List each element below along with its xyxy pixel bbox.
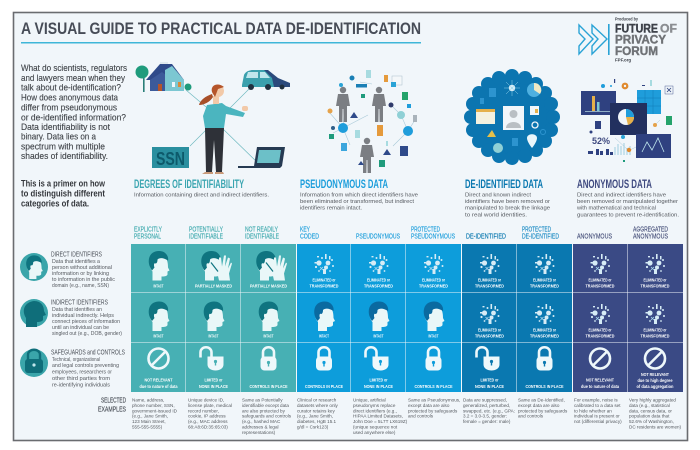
cell: key coded direct: ELIMINATED or [312,278,336,282]
example: aggregated anonymous: 52.6% of Washington, [629,419,674,424]
example: key coded: g/dl = Csrk123) [297,424,329,430]
column headers: PROTECTED [522,224,551,234]
section: de-identified data: Direct and known indirect [465,192,532,198]
cell: protected de-identified safeguards [517,343,572,392]
cell: potentially identifiable direct [186,244,240,292]
intro text: What do scientists, regulators [21,63,127,73]
primer text: This is a primer on how [21,178,106,188]
row label: direct identifiers: domain (e.g., name, SSN) [52,283,109,289]
cell: pseudonymous safeguards: NONE IN PLACE [364,384,393,389]
column headers: POTENTIALLY [189,224,223,234]
cell: protected pseudonymous direct [406,244,461,292]
illustration: anonymous dashboards [581,79,673,162]
column headers: EXPLICITLY [134,224,162,234]
section: anonymous data [576,177,679,218]
cell: pseudonymous safeguards: LIMITED or [370,378,388,382]
selected examples label [98,396,126,414]
example: key coded: diabetes, HgB 15.1 [297,419,337,424]
column headers: PSEUDONYMOUS [356,232,400,240]
intro text: and lawyers mean when they [21,73,125,83]
row label: safeguards and controls [20,348,125,388]
section: degrees of identifiability: DEGREES OF IDENTIFIABILITY [134,177,244,191]
cell: aggregated anonymous indirect: TRANSFORMED [640,334,670,338]
cell: explicitly personal safeguards: due to nature of data [140,384,178,389]
cell: pseudonymous indirect [351,293,406,342]
cell: pseudonymous direct: TRANSFORMED [364,284,393,288]
cell: protected de-identified direct [517,244,572,292]
selected examples label: EXAMPLES [98,404,126,414]
example: explicitly personal: (e.g., Jane Smith, [132,414,168,419]
column headers: DE-IDENTIFIED [522,232,559,240]
column headers: CODED [300,232,319,240]
cell: potentially identifiable safeguards [186,343,240,392]
cell: aggregated anonymous indirect: ELIMINATED or [644,328,667,332]
cell: anonymous indirect [573,293,628,342]
selected examples label: SELECTED [101,396,126,404]
illustration: de-identified scalloped circle [464,69,560,165]
cell: key coded indirect [297,293,350,342]
cell: de-identified indirect: TRANSFORMED [475,334,504,338]
column headers: PERSONAL [134,232,161,240]
cell: potentially identifiable indirect: INTACT [208,334,219,338]
cell: de-identified safeguards: LIMITED or [480,378,499,382]
section: pseudonymous data: PSEUDONYMOUS DATA [300,177,388,191]
primer text: to distinguish different [21,188,105,198]
example: pseudonymous: (unique sequence not [353,424,398,430]
section: anonymous data: guarantees to prevent re-identification. [577,212,679,218]
cell: de-identified direct: ELIMINATED or [478,278,501,282]
section: degrees of identifiability [134,177,269,198]
cell: de-identified indirect [462,293,516,342]
cell: de-identified indirect: ELIMINATED or [478,328,501,332]
column headers [134,224,668,240]
example: potentially identifiable: record number, [188,408,219,413]
example: key coded: datasets where only [297,403,339,408]
cell: anonymous direct: ELIMINATED or [588,278,612,282]
column headers: KEY [300,224,310,234]
cell: not readily identifiable indirect: INTACT [264,334,274,338]
example: de-identified: generalized, perturbed, [463,403,510,408]
example: protected de-identified: and controls [518,414,544,419]
example: pseudonymous: HIPAA Limited Datasets, [353,414,403,419]
cell: anonymous indirect: ELIMINATED or [588,328,612,332]
row label: direct identifiers: Data that identifies a [52,259,100,265]
example: not readily identifiable: identifiable except data [242,403,289,408]
illustration: woman with identifiers [136,62,290,174]
cell: potentially identifiable direct: PARTIALLY MASKED [195,284,232,288]
example: potentially identifiable: Unique device ID, [188,398,224,402]
example: pseudonymous: Unique, artificial [353,398,386,402]
example: explicitly personal: government-issued ID [132,408,178,413]
cell: key coded safeguards: CONTROLS IN PLACE [305,384,343,389]
section: pseudonymous data: been eliminated or transformed, but indirect [300,199,415,205]
cell: protected pseudonymous safeguards: CONTROLS IN PLACE [414,384,452,389]
example: pseudonymous: used anywhere else) [353,430,396,435]
section: anonymous data: with mathematical and technical [576,206,656,212]
cell: protected de-identified direct: ELIMINATED or [533,278,556,282]
row label: safeguards and controls: other third parties from [52,376,111,382]
section: pseudonymous data: identifiers remain intact. [300,206,362,212]
logo: Future of Privacy Forum: FPF.org [615,58,631,62]
row label: indirect identifiers: connect pieces of information [52,319,120,325]
cell: pseudonymous direct [351,244,406,292]
cell: potentially identifiable indirect [186,293,240,342]
row label: direct identifiers: DIRECT IDENTIFIERS [51,250,102,258]
illustration: anonymous dashboards: 52% [592,136,610,146]
section: degrees of identifiability: Information containing direct and indirect identifiers. [134,192,269,198]
logo: Future of Privacy Forum: OF [660,22,677,36]
row label: safeguards and controls: and legal controls preventing [52,363,119,369]
intro text [21,63,127,161]
row label: direct identifiers: person without additional [52,265,112,271]
row label: direct identifiers: to information in the public [52,277,115,283]
column headers: PROTECTED [411,224,440,234]
cell: key coded indirect: INTACT [319,334,329,338]
example: not readily identifiable: safeguards and controls [242,414,292,419]
cell: de-identified direct: TRANSFORMED [475,284,504,288]
example: potentially identifiable: (e.g., MAC address [188,419,228,424]
column headers: PSEUDONYMOUS [411,232,455,240]
section: anonymous data: been removed or manipulated together [577,199,678,205]
row label: direct identifiers [20,250,115,289]
matrix table [131,244,683,392]
intro text: spectrum with multiple [21,142,105,152]
cell: explicitly personal indirect [131,293,186,342]
example: not readily identifiable: addresses & legal [242,424,279,430]
cell: not readily identifiable indirect [241,293,296,342]
primer text [21,178,106,208]
example: not readily identifiable: (e.g., hashed MAC [242,419,281,424]
section: de-identified data: DE-IDENTIFIED DATA [465,177,543,191]
example: de-identified: female = gender: male) [463,419,511,424]
cell: explicitly personal safeguards [131,343,186,392]
intro text: binary. Data lies on a [21,132,96,142]
example: pseudonymous: direct identifiers (e.g., [353,408,397,413]
example: protected pseudonymous: except data are also [408,403,450,408]
cell: protected pseudonymous indirect: INTACT [428,334,439,338]
intro text: Data identifiability is not [21,122,110,132]
example: potentially identifiable: cookie, IP address [188,414,226,419]
example: aggregated anonymous: population data that [629,414,670,419]
example: potentially identifiable: license plate, medical [188,403,232,408]
cell: aggregated anonymous direct: ELIMINATED or [644,278,667,282]
cell: de-identified direct [462,244,516,292]
example: explicitly personal: Name, address, [132,398,164,402]
cell: protected de-identified indirect: ELIMINATED or [533,328,556,332]
cell: de-identified safeguards: NONE IN PLACE [475,384,504,389]
row label: indirect identifiers: Data that identifies an [52,307,102,313]
section: anonymous data: ANONYMOUS DATA [577,177,652,191]
row label: indirect identifiers: until an individual can be [52,325,109,331]
logo: Future of Privacy Forum [579,16,677,62]
cell: protected de-identified indirect: TRANSFORMED [530,334,559,338]
cell: not readily identifiable safeguards [241,343,296,392]
column headers: IDENTIFIABLE [189,232,223,240]
section: de-identified data: manipulated to break the linkage [465,206,550,212]
example: de-identified: swapped, etc. (e.g., GPA: [463,408,515,413]
intro text: talk about de-identification? [21,82,121,92]
cell: explicitly personal indirect: INTACT [154,334,164,338]
cell: protected de-identified indirect [517,293,572,342]
cell: key coded direct: TRANSFORMED [310,284,339,288]
row label: safeguards and controls: re-identifying individuals [52,382,110,388]
cell: protected pseudonymous direct: ELIMINATED or [422,278,445,282]
illustration: woman with identifiers: SSN [156,149,185,169]
cell: key coded safeguards [297,343,350,392]
intro text: or de-identified information? [21,112,126,122]
title: A VISUAL GUIDE TO PRACTICAL DATA DE-IDENTIFICATION [21,19,421,38]
cell: aggregated anonymous indirect [628,293,683,342]
row label: indirect identifiers: singled out (e.g., DOB, gender) [52,331,122,337]
example: anonymous: For example, noise is [574,398,618,402]
column headers: ANONYMOUS [633,232,668,240]
section: de-identified data: identifiers have been removed or [465,199,550,205]
cell: not readily identifiable safeguards: CONTROLS IN PLACE [250,384,288,389]
example: aggregated anonymous: Very highly aggregated [629,398,676,402]
row label: indirect identifiers [20,298,122,337]
example: not readily identifiable: representations) [242,430,276,435]
example: explicitly personal: 123 Main Street, [132,419,166,424]
example: protected pseudonymous: protected by safeguards [408,408,458,413]
example: aggregated anonymous: data, census data, or [629,408,672,413]
example: pseudonymous: pseudonyms replace [353,403,396,408]
column headers: AGGREGATED [633,224,668,234]
row label: safeguards and controls: SAFEGUARDS and CONTROLS [51,348,125,356]
row label: safeguards and controls: Technical, organizational [52,357,100,363]
cell: aggregated anonymous direct [628,244,683,292]
cell: aggregated anonymous safeguards: of data aggregation [636,384,674,389]
section: pseudonymous data [300,177,418,212]
logo: Future of Privacy Forum: PRIVACY [615,32,666,46]
example: key coded: curator retains key [297,408,335,413]
primer text: categories of data. [21,198,89,208]
example: anonymous: not (differential privacy) [574,419,622,424]
section: de-identified data [465,177,550,218]
intro text: shades of identifiability. [21,151,108,161]
example: de-identified: 3.2 = 3.0-3.5, gender: [463,414,507,419]
example: not readily identifiable: are also protected by [242,408,286,413]
cell: explicitly personal direct: INTACT [154,284,164,288]
example: protected de-identified: except data are also [518,403,560,408]
example: key coded: Clinical or research [297,398,337,402]
example: potentially identifiable: 68:A8:6D:35:65:03) [188,424,228,430]
cell: aggregated anonymous safeguards: NOT RELEVANT [641,372,669,377]
example: not readily identifiable: Same as Potentially [242,398,283,402]
illustration: pseudonymous network [328,70,417,173]
logo: Future of Privacy Forum: FUTURE [615,22,658,36]
cell: anonymous safeguards: NOT RELEVANT [586,378,614,382]
cell: de-identified safeguards [462,343,516,392]
example: key coded: (e.g., Jane Smith, [297,414,333,419]
example: de-identified: Data are suppressed, [463,398,507,402]
cell: protected pseudonymous indirect [406,293,461,342]
example: protected de-identified: protected by safeguards [518,408,568,413]
example: explicitly personal: 555-555-5555) [132,424,163,430]
cell: protected de-identified safeguards: CONTROLS IN PLACE [526,384,564,389]
cell: anonymous indirect: TRANSFORMED [586,334,615,338]
cell: protected pseudonymous direct: TRANSFORMED [419,284,448,288]
cell: aggregated anonymous safeguards: due to high degree [638,378,673,383]
column headers: ANONYMOUS [577,232,612,240]
row label: indirect identifiers: INDIRECT IDENTIFIERS [51,298,108,306]
example: explicitly personal: phone number, SSN, [132,403,175,408]
cell: aggregated anonymous safeguards [628,343,683,392]
example: anonymous: to hide whether an [574,408,612,413]
example: protected pseudonymous: Same as Pseudonymous, [408,398,460,402]
example: anonymous: calibrated to a data set [574,403,621,408]
column headers: DE-IDENTIFIED [466,232,506,240]
cell: anonymous safeguards [573,343,628,392]
section: pseudonymous data: Information from which direct identifiers have [300,192,418,198]
example: aggregated anonymous: data (e.g., statistical [629,403,670,408]
cell: key coded direct [297,244,350,292]
column headers: NOT READILY [245,224,278,234]
cell: pseudonymous indirect: INTACT [374,334,384,338]
example: pseudonymous: John Doe = 5L7T LX619Z) [353,419,408,424]
row label: safeguards and controls: employees, researchers or [52,370,112,376]
example: protected de-identified: Same as De-Identified, [518,398,565,402]
intro text: differ from pseudonymous [21,102,117,112]
cell: protected de-identified direct: TRANSFORMED [530,284,559,288]
cell: aggregated anonymous direct: TRANSFORMED [640,284,670,288]
cell: anonymous direct [573,244,628,292]
logo: Future of Privacy Forum: FORUM [615,44,658,58]
logo: Future of Privacy Forum: Produced by [615,16,638,22]
cell: potentially identifiable safeguards: LIMITED or [204,378,223,382]
cell: explicitly personal safeguards: NOT RELEVANT [144,378,173,382]
intro text: How does anonymous data [21,92,118,102]
cell: potentially identifiable safeguards: NONE IN PLACE [199,384,228,389]
row label: indirect identifiers: individual indirectly. Helps [52,313,114,319]
cell: not readily identifiable direct: PARTIALLY MASKED [250,284,287,288]
row label: direct identifiers: information or by linking [52,271,109,277]
example: anonymous: individual is present or [574,414,620,419]
example: protected pseudonymous: and controls [408,414,434,419]
cell: anonymous direct: TRANSFORMED [586,284,615,288]
cell: protected pseudonymous safeguards [406,343,461,392]
section: anonymous data: Direct and indirect identifiers have [577,192,666,198]
cell: not readily identifiable direct [241,244,296,292]
cell: pseudonymous direct: ELIMINATED or [367,278,390,282]
cell: anonymous safeguards: due to nature of data [581,384,619,389]
column headers: IDENTIFIABLE [245,232,279,240]
example: aggregated anonymous: DC residents are women) [629,424,682,430]
cell: explicitly personal direct [131,244,186,292]
cell: pseudonymous safeguards [351,343,406,392]
section: de-identified data: to real world identities. [465,212,527,218]
